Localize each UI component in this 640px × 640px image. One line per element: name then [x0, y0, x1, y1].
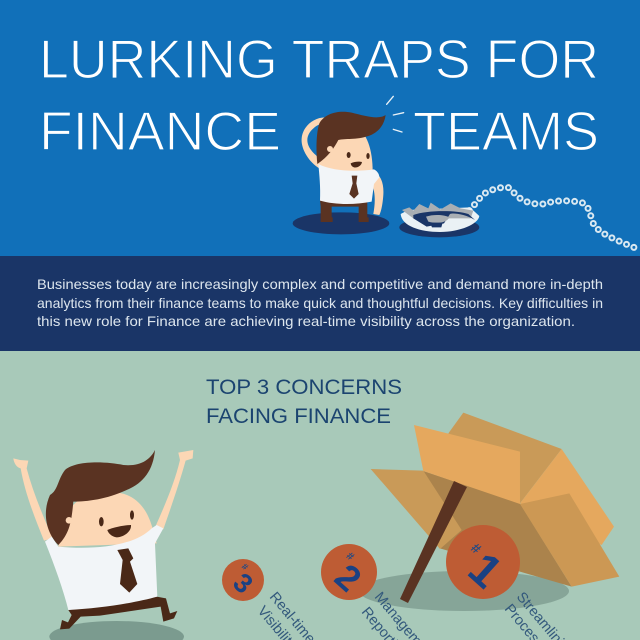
box right flap — [520, 449, 614, 545]
title — [39, 28, 599, 162]
ball: number 3 — [222, 559, 264, 601]
illustration: cheering man — [13, 450, 193, 640]
man tie — [349, 176, 359, 199]
panel: header background — [0, 0, 640, 256]
ball: number 2: # — [344, 550, 356, 563]
heading: top 3 concerns: TOP 3 CONCERNS — [206, 375, 402, 399]
worry marks — [387, 96, 404, 132]
cheering man arms — [13, 450, 193, 541]
illustration: bear trap and chain — [399, 187, 640, 250]
man hair — [316, 112, 386, 164]
trap teeth — [402, 203, 473, 218]
trap base — [401, 207, 479, 232]
ball: number 3: # — [240, 561, 250, 572]
ball: number 1 — [446, 525, 520, 599]
ground shadow under box — [359, 571, 569, 611]
box back flap — [448, 413, 562, 503]
trap interior — [413, 211, 475, 227]
title: FINANCE — [39, 100, 281, 162]
trap shadow — [399, 217, 479, 237]
intro text block: Businesses today are increasingly complex and competitive and demand more in-depth — [37, 276, 603, 292]
panel: intro band background — [0, 256, 640, 351]
heading: top 3 concerns — [206, 375, 402, 428]
cheering man pants — [60, 597, 177, 629]
ball: number 1: # — [468, 540, 484, 557]
prop stick — [400, 481, 467, 603]
box left flap — [371, 469, 462, 549]
ball: number 3: 3 — [227, 567, 259, 599]
ball: number 2: 2 — [327, 556, 370, 600]
man raised arm — [302, 117, 327, 168]
title: LURKING TRAPS FOR — [39, 28, 599, 90]
ball: number 2 — [321, 544, 377, 600]
box front right flap — [520, 493, 619, 587]
intro text block — [37, 276, 603, 329]
intro text block: analytics from their finance teams to make quick and thoughtful decisions. Key difficulties in — [37, 295, 603, 311]
trap plate — [426, 215, 449, 223]
man shirt — [318, 164, 379, 204]
man ear — [327, 146, 333, 152]
box top flap — [414, 425, 520, 504]
chain — [469, 187, 640, 250]
cheering man face — [99, 510, 134, 537]
box interior — [423, 471, 572, 587]
illustration: worried man — [293, 96, 404, 234]
cheering man shirt — [45, 525, 163, 610]
man lowered arm — [372, 172, 383, 215]
man face — [347, 152, 370, 167]
man legs — [320, 200, 369, 222]
man head — [317, 127, 373, 173]
cheering man head — [58, 492, 157, 547]
cheering man hair — [46, 450, 155, 545]
intro text block: this new role for Finance are achieving real-time visibility across the organization. — [37, 313, 575, 329]
illustration: cardboard box trap — [371, 413, 619, 587]
cheering man ear — [66, 517, 72, 524]
cheering man shadow — [49, 621, 184, 640]
panel: concerns background — [0, 351, 640, 640]
ball: number 1: 1 — [459, 542, 513, 598]
title: TEAMS — [413, 100, 599, 162]
cheering man tie — [117, 548, 137, 593]
heading: top 3 concerns: FACING FINANCE — [206, 404, 391, 428]
man shadow — [293, 212, 389, 234]
